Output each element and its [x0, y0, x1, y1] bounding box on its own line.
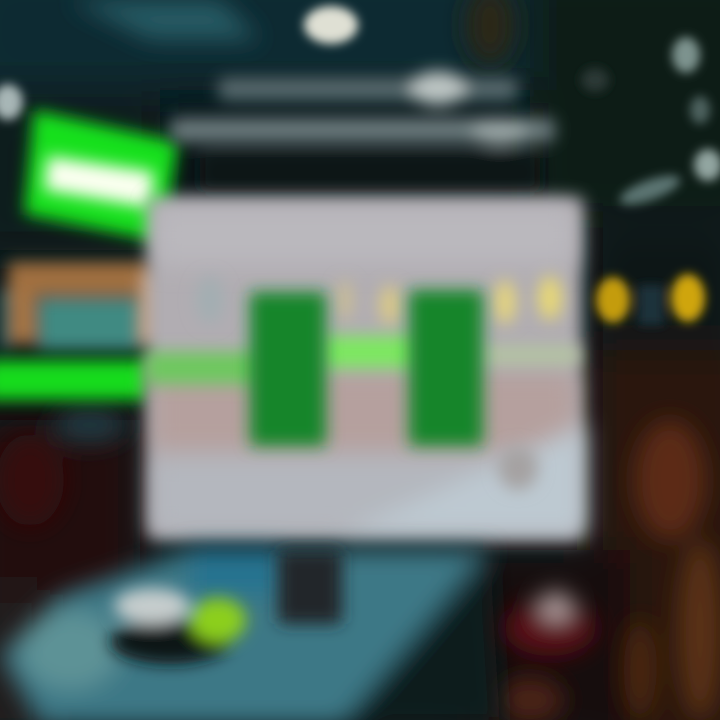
red lamp	[504, 592, 596, 656]
green light strip	[0, 360, 150, 400]
yellow table cells	[196, 276, 562, 325]
dark band under heading	[200, 152, 540, 192]
heading line one	[218, 78, 518, 100]
green band across panel	[145, 336, 580, 384]
heading	[170, 71, 555, 192]
green sign	[24, 110, 178, 242]
small badge	[498, 446, 538, 490]
ceiling lights	[0, 6, 720, 210]
panel	[145, 198, 585, 538]
dark box	[278, 550, 342, 624]
panel lower tint	[152, 205, 585, 535]
yellow lamps	[596, 274, 705, 325]
device	[110, 588, 246, 664]
table	[0, 548, 500, 720]
right green column	[409, 290, 483, 446]
panel body	[148, 198, 582, 538]
left green column	[250, 292, 326, 446]
left wall band	[0, 262, 170, 350]
heading line two	[170, 118, 555, 142]
